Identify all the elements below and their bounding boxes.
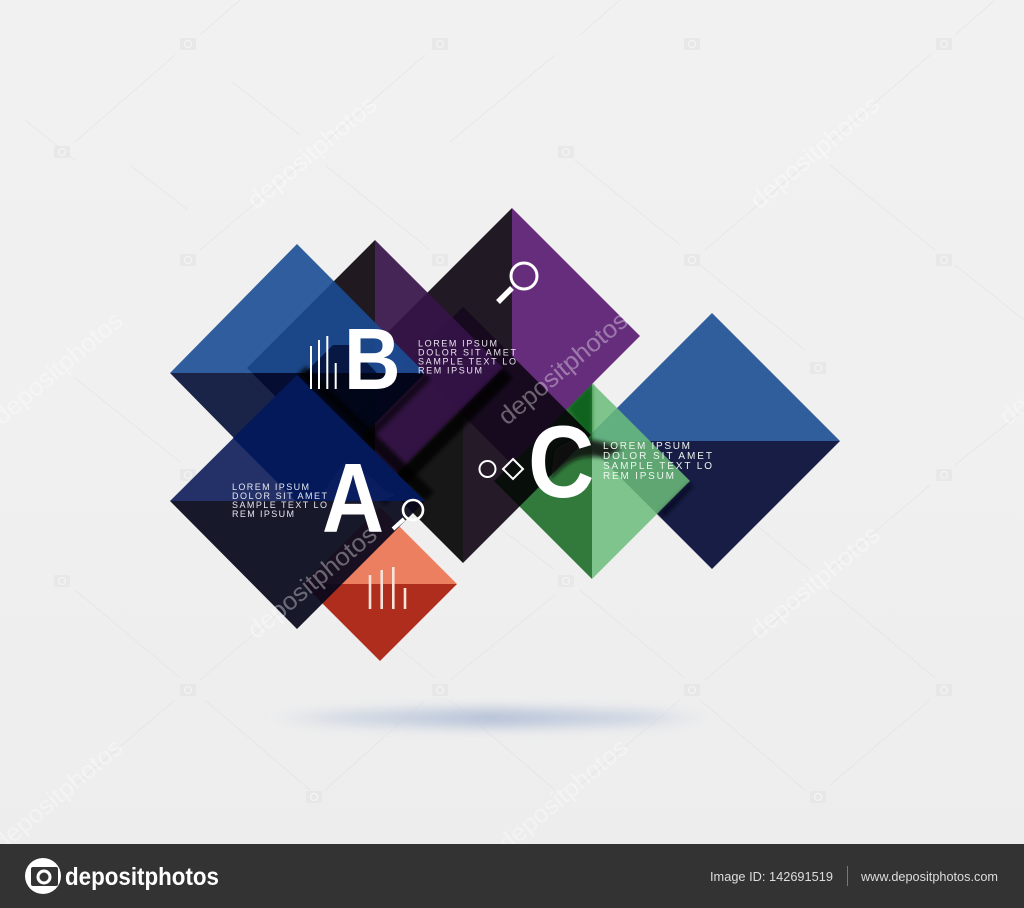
text block A: DOLOR SIT AMET [232, 491, 328, 501]
shadow under diamond A [297, 366, 434, 501]
text block A: SAMPLE TEXT LO [232, 500, 327, 510]
footer logo text: depositphotos [65, 863, 219, 891]
footer divider [847, 866, 848, 886]
text block A: LOREM IPSUM [232, 482, 309, 492]
floor shadow [268, 709, 712, 727]
panel: top purple diamond [384, 208, 640, 464]
text block C: SAMPLE TEXT LO [603, 461, 712, 472]
shadow under dark purple diamond [375, 368, 513, 506]
watermarks: depositphotos [745, 520, 885, 645]
icon: circle [480, 461, 496, 477]
text block C: DOLOR SIT AMET [603, 451, 712, 462]
heading letter B: B [344, 310, 401, 408]
text block C [603, 441, 712, 482]
icon: bars in red diamond [370, 567, 405, 609]
text block C: LOREM IPSUM [603, 441, 690, 452]
text block B: LOREM IPSUM [418, 338, 497, 348]
panel: green diamond [494, 383, 690, 579]
panel: right blue diamond [584, 313, 840, 569]
shadow under letter C [550, 439, 622, 480]
text block B: REM IPSUM [418, 366, 482, 376]
panel: navy diamond A [170, 375, 425, 629]
shadow under blue diamond B [364, 373, 431, 439]
icon: small diamond [503, 459, 523, 479]
panel: dark purple diamond [247, 240, 503, 496]
footer bar [0, 844, 1024, 908]
panel: centre dark diamond [335, 307, 591, 563]
footer url: www.depositphotos.com [860, 870, 998, 884]
heading letter C: C [528, 404, 594, 519]
watermarks: depositphotos [242, 520, 382, 645]
image id: Image ID: 142691519 [710, 870, 833, 884]
watermarks: depositphotos [493, 306, 633, 431]
watermarks: depositphotos [242, 90, 382, 215]
text block B [418, 338, 516, 376]
icon: magnifier on purple diamond [498, 263, 537, 302]
text block A [232, 482, 328, 519]
panel: red diamond [303, 507, 457, 661]
text block B: DOLOR SIT AMET [418, 348, 516, 358]
overlap of centre and purple diamonds [409, 307, 566, 464]
watermarks: depositphotos [493, 733, 633, 858]
watermarks: depositphotos [745, 90, 885, 215]
icon: bars in blue diamond [311, 336, 336, 389]
footer logo icon [25, 858, 61, 894]
heading letter A: A [322, 444, 384, 553]
icon: magnifier on navy diamond [393, 500, 423, 529]
shadow under green diamond [659, 483, 693, 517]
panel: blue diamond B [170, 244, 425, 502]
text block A: REM IPSUM [232, 509, 294, 519]
text block B: SAMPLE TEXT LO [418, 356, 516, 366]
text block C: REM IPSUM [603, 471, 674, 482]
